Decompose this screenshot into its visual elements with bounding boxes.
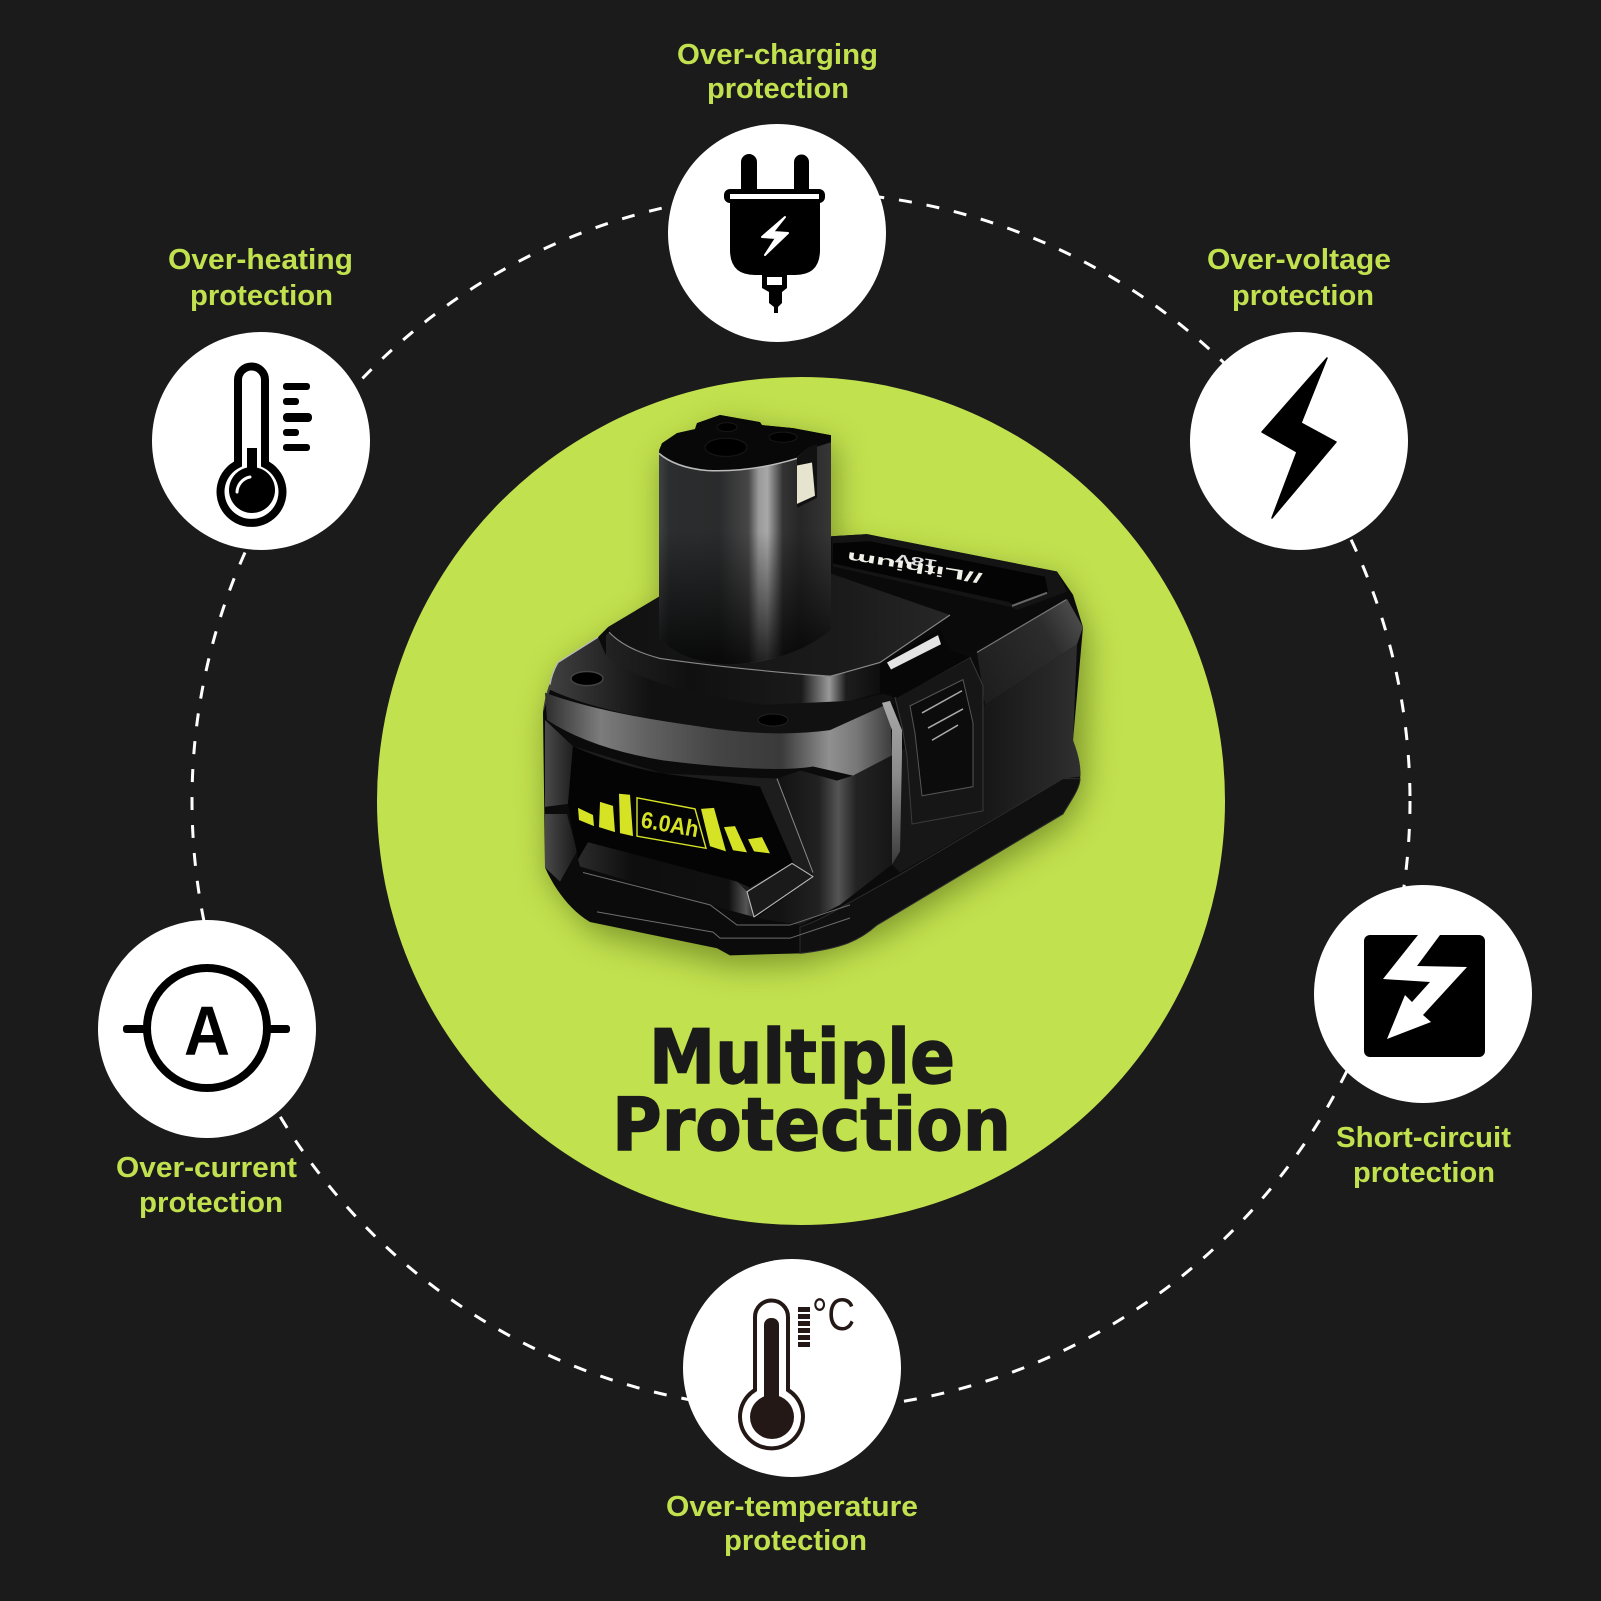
top surface of shoulder (543, 637, 895, 733)
tower rim line (659, 453, 797, 471)
top label plate rim (832, 534, 1067, 610)
label: over-temperature: protection (724, 1525, 867, 1557)
tower holes (705, 423, 797, 456)
deck behind tower (831, 561, 1063, 650)
base lip right (800, 779, 1080, 953)
right side panel (892, 644, 1080, 873)
label: short-circuit: protection (1353, 1157, 1495, 1189)
label: over-heating: protection (190, 280, 333, 312)
label: over-temperature (666, 1491, 918, 1557)
latch panel (895, 657, 983, 824)
circle: over-heating (152, 332, 370, 550)
label: over-current: protection (139, 1187, 283, 1219)
raised step top (608, 574, 950, 676)
circle: short-circuit (1314, 885, 1532, 1103)
battery product illustration (543, 415, 1087, 965)
dashed connection ring (192, 192, 1410, 1410)
label: over-voltage: protection (1232, 280, 1374, 312)
step light edge (609, 615, 950, 677)
grip pocket (747, 863, 813, 917)
label: over-temperature: Over-temperature (666, 1491, 918, 1523)
latch ridges (922, 691, 963, 740)
left lower panel (545, 814, 577, 882)
label: over-charging: protection (707, 73, 849, 105)
node: over-current (98, 920, 316, 1219)
plate text: 18V: 18V (894, 551, 938, 571)
icon: thermometer with Celsius (740, 1289, 855, 1448)
right upper band (977, 599, 1083, 705)
shoulder light edge (550, 637, 598, 685)
screw hole left (571, 672, 603, 686)
latch inner button (910, 680, 973, 796)
left inset panel (545, 720, 573, 807)
central green circle (377, 377, 1225, 1225)
plate text: Lithium: //Lithium (846, 549, 983, 586)
capacity text: 6.0Ah (639, 806, 701, 842)
battery shadow (547, 425, 1087, 965)
node: short-circuit (1314, 885, 1532, 1189)
label: over-heating (168, 244, 353, 312)
plate step edge (1012, 593, 1047, 606)
raised step band (606, 632, 880, 705)
circle: over-current (98, 920, 316, 1138)
lip highlight lines (583, 873, 850, 938)
label: over-voltage: Over-voltage (1207, 244, 1391, 276)
icon: square with arrow bolt (1364, 935, 1485, 1057)
black front label (568, 746, 793, 888)
latch clip (880, 629, 970, 698)
title line 2: Protection (612, 1083, 1011, 1168)
title line 1: Multiple (649, 1013, 955, 1101)
capacity box (637, 798, 706, 848)
label: over-current: Over-current (116, 1152, 297, 1184)
icon: thermometer with Celsius: °C (812, 1289, 855, 1340)
label: over-voltage (1207, 244, 1391, 312)
label: over-charging (677, 39, 878, 105)
label: over-charging: Over-charging (677, 39, 878, 71)
node: over-charging (668, 39, 886, 342)
title (612, 1013, 1011, 1168)
deck edge line (977, 600, 1066, 652)
capacity bars (578, 794, 770, 853)
icon: thermometer with scale (220, 366, 312, 523)
node: over-heating (152, 244, 370, 550)
label outer edge (777, 779, 813, 873)
circle: over-charging (668, 124, 886, 342)
node: over-voltage (1190, 244, 1408, 550)
node: over-temperature (666, 1259, 918, 1557)
circle: over-temperature (683, 1259, 901, 1477)
icon: lightning bolt (1262, 358, 1336, 518)
body silhouette (543, 415, 1083, 955)
tower contact window (797, 444, 817, 508)
icon: ammeter (123, 968, 290, 1088)
tower body (659, 435, 831, 664)
latch silver strip (882, 701, 902, 864)
tower lower shade (659, 531, 831, 664)
label: short-circuit (1336, 1122, 1511, 1189)
front right panel (757, 755, 892, 925)
screw hole centre (758, 714, 788, 726)
lit shoulder band (545, 693, 892, 776)
circle: over-voltage (1190, 332, 1408, 550)
label: over-current (116, 1152, 297, 1219)
icon: plug (724, 154, 825, 313)
grip surface (578, 842, 754, 917)
icon: ammeter: A (184, 992, 230, 1070)
label: short-circuit: Short-circuit (1336, 1122, 1511, 1154)
label border (568, 746, 813, 917)
label: over-heating: Over-heating (168, 244, 353, 276)
tower top face (659, 415, 831, 471)
top label plate (833, 541, 1048, 605)
